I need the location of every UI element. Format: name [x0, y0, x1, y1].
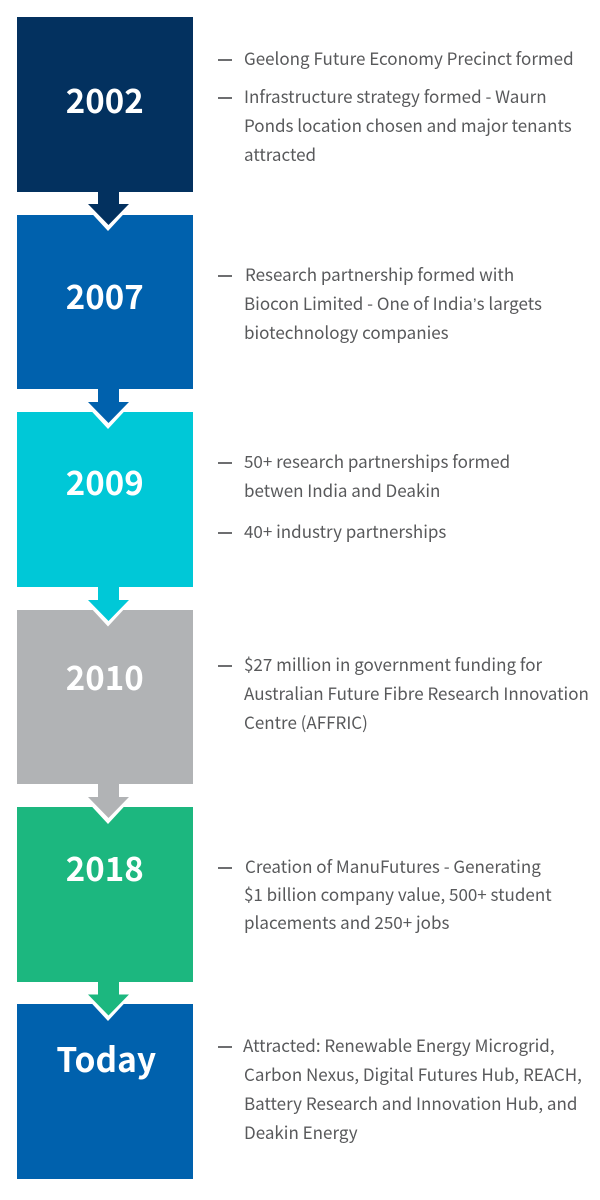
- text block: Today item: [218, 1032, 582, 1144]
- panel: 2007 block: [17, 215, 192, 389]
- text block: 2007 item: biotechnology companies: [244, 319, 449, 344]
- text block: 2009 second item: 40+ industry partnerships: [244, 518, 446, 543]
- arrow: 2007 to 2009: [84, 388, 132, 429]
- text block: Today item: Carbon Nexus, Digital Futures Hub, REACH,: [244, 1061, 582, 1086]
- text block: 2002 second item: [218, 83, 572, 166]
- heading: 2009: 2009: [66, 457, 144, 505]
- heading: 2010: 2010: [66, 652, 144, 700]
- heading: 2002: 2002: [66, 75, 144, 123]
- text block: 2002 second item: attracted: [244, 141, 316, 166]
- text block: 2010 item: Australian Future Fibre Research Innovation: [244, 680, 589, 705]
- text block: 2002 second item: Infrastructure strategy formed - Waurn: [244, 83, 547, 108]
- text block: Today item: Deakin Energy: [244, 1119, 358, 1144]
- text block: 2007 item: Biocon Limited - One of India’s largets: [244, 290, 542, 315]
- arrow: 2010 to 2018: [84, 783, 132, 824]
- text block: 2010 item: $27 million in government funding for: [244, 651, 542, 676]
- arrow: 2018 to Today: [84, 981, 132, 1021]
- heading: Today: Today: [56, 1033, 156, 1082]
- text block: 2010 item: [218, 651, 589, 734]
- heading: 2018: 2018: [66, 843, 144, 891]
- text block: 2018 item: placements and 250+ jobs: [244, 909, 449, 934]
- panel: Today block: [17, 1004, 192, 1178]
- panel: 2009 block: [17, 412, 192, 586]
- text block: 2002 second item: Ponds location chosen and major tenants: [244, 112, 572, 137]
- text block: 2009 first item: [218, 448, 510, 502]
- arrow: 2009 to 2010: [84, 586, 132, 626]
- arrow: 2002 to 2007: [84, 191, 132, 231]
- text block: 2002 first item: Geelong Future Economy Precinct formed: [244, 45, 574, 70]
- text block: 2007 item: [218, 261, 542, 344]
- text block: 2009 first item: 50+ research partnerships formed: [244, 448, 510, 473]
- panel: 2002 block: [17, 17, 192, 192]
- panel: 2010 block: [17, 610, 192, 784]
- text block: 2010 item: Centre (AFFRIC): [244, 709, 368, 734]
- text block: Today item: Attracted: Renewable Energy Microgrid,: [243, 1032, 555, 1057]
- text block: 2009 first item: betwen India and Deakin: [244, 477, 440, 502]
- text block: 2018 item: [218, 853, 552, 934]
- text block: 2018 item: Creation of ManuFutures - Generating: [245, 853, 541, 878]
- text block: 2018 item: $1 billion company value, 500+ student: [244, 881, 552, 906]
- text block: 2007 item: Research partnership formed with: [245, 261, 514, 286]
- panel: 2018 block: [17, 807, 192, 982]
- heading: 2007: 2007: [66, 271, 144, 319]
- text block: Today item: Battery Research and Innovation Hub, and: [244, 1090, 577, 1115]
